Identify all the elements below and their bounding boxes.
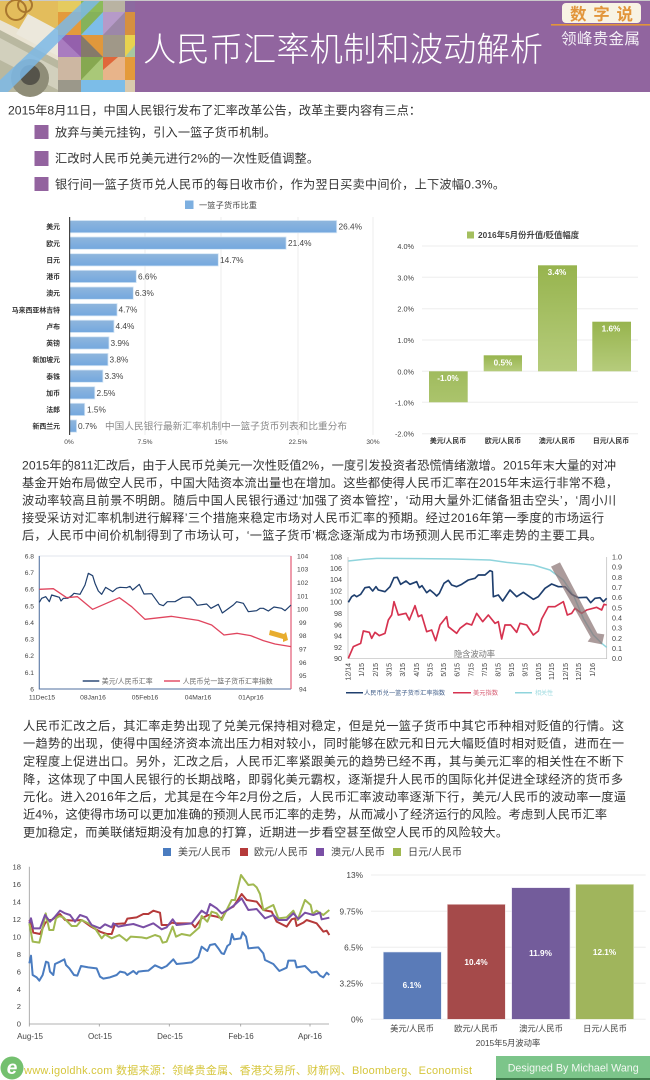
line chart: USD/CNY vs CNY basket index: 96 [299,660,307,667]
bar chart: currency basket weights: 14.7% [220,255,244,265]
line chart: basket index, dollar index, correlation: 5/15 [428,663,434,677]
line chart: USD/CNY vs CNY basket index: 6.3 [25,636,34,644]
line chart: USD/CNY vs CNY basket index: 102 [297,580,308,587]
series: USD/CNY [39,573,291,613]
bar chart: currency basket weights: 澳元 [46,289,60,298]
line chart: currency volatility: 18 [13,862,21,871]
bar chart: May 2016 appreciation: 日元/人民币 [593,436,629,445]
bullet list: 放弃与美元挂钩，引入一篮子货币机制。 [55,124,276,140]
bullet list [34,124,505,192]
icon: e logo: e [7,1058,18,1079]
paragraph: after the 811 reform: 2015年的811汇改后，由于人民币兑美元一次性贬值2%，一度引发投资者恐慌情绪激增。2015年末大量的对冲 [22,458,616,472]
line chart: basket index, dollar index, correlation: 0.5 [612,603,622,612]
line chart: basket index, dollar index, correlation: 1/16 [590,663,597,677]
bar chart: currency basket weights: 3.8% [110,354,129,364]
bar chart: May 2016 appreciation: 0.0% [397,367,415,376]
line chart: basket index, dollar index, correlation: 7/15 [468,663,476,677]
legend: volatility series: 美元/人民币 [178,846,231,858]
line chart: basket index, dollar index, correlation: 4/15 [414,663,421,677]
line chart: USD/CNY vs CNY basket index: 6.5 [25,603,34,610]
paragraph: after the 811 reform: 接受采访对汇率机制进行解释’三个措施来稳定市场对人民币汇率的预期。经过2016年第一季度的市场运行 [22,510,604,525]
bar chart: currency basket weights: 美元 [46,222,60,231]
paragraph: after the reform trend: 定程度上促进出口。另外，汇改之后，人民币汇率紧跟美元的趋势已经不再，其与美元汇率的相关性在不断下 [23,754,624,768]
paragraph: after the reform trend: 元化。进入2016年之后，尤其是在今年2月份之后，人民币汇率波动率逐渐下行，美元/人民币的波动率一度逼 [23,789,626,804]
line chart: USD/CNY vs CNY basket index: 6.2 [25,653,34,660]
bar chart: May 2016 appreciation: 2.0% [397,305,415,314]
line chart: basket index, dollar index, correlation: 10/15 [536,663,543,681]
bar chart: May 2015 volatility: 9.75% [339,906,364,916]
bar chart: May 2015 volatility: 3.25% [339,978,364,988]
bar chart: May 2015 volatility: 13% [346,870,364,880]
bar chart: May 2016 appreciation: 3.0% [397,273,415,282]
line chart: USD/CNY vs CNY basket index: 6 [30,686,34,693]
bar chart: currency basket weights: 日元 [46,256,60,264]
line chart: basket index, dollar index, correlation: 90 [334,654,342,663]
paragraph: after the 811 reform [22,458,618,542]
line chart: basket index, dollar index, correlation: 0.3 [612,624,622,633]
series: dollar index [348,602,607,658]
bar chart: currency basket weights: 1.5% [87,404,107,414]
legend: volatility series: 澳元/人民币 [331,846,385,858]
bar chart: currency basket weights: 7.5% [137,439,153,446]
arrow: orange trend arrow [269,630,288,642]
line chart: basket index, dollar index, correlation: 0.8 [612,573,622,582]
designer credit: Designed By Michael Wang [508,1062,639,1074]
icon: e logo [0,1056,24,1080]
line chart: USD/CNY vs CNY basket index: 08Jan16 [80,694,106,702]
line chart: currency volatility: Apr-16 [298,1032,323,1041]
bar chart: May 2016 appreciation: 1.6% [602,324,621,334]
line chart: USD/CNY vs CNY basket index: 94 [299,686,307,693]
line chart: USD/CNY vs CNY basket index: 6.8 [25,553,34,560]
line chart: USD/CNY vs CNY basket index: 104 [297,553,308,560]
line chart: basket index, dollar index, correlation: 12/15 [563,663,570,681]
line chart: USD/CNY vs CNY basket index: 103 [297,567,308,574]
line chart: basket index, dollar index, correlation: 94 [334,632,342,641]
line chart: basket index, dollar index, correlation: 9/15 [522,663,530,677]
paragraph: after the reform trend [23,718,626,840]
title: 人民币汇率机制和波动解析 [143,32,543,69]
series: basket index [348,571,607,603]
line chart: basket index, dollar index, correlation: 106 [330,564,342,573]
bar chart: May 2015 volatility: 6.1% [403,981,422,990]
line chart: USD/CNY vs CNY basket index: 101 [297,593,308,600]
bar chart: May 2015 volatility: 日元/人民币 [583,1024,627,1034]
line chart: basket index, dollar index, correlation: 96 [334,620,342,629]
line chart: basket index, dollar index, correlation: 3/15 [400,663,407,677]
line chart: basket index, dollar index, correlation: 104 [330,575,342,584]
bar chart: May 2016 appreciation: -1.0% [395,398,415,407]
bar chart: May 2015 volatility: 6.5% [344,942,364,952]
chart caption: 中国人民银行最新汇率机制中一篮子货币列表和比重分布 [105,420,347,432]
paragraph: after the 811 reform: 波动率较高且前景不明朗。随后中国人民银行通过‘加强了资本管控’，‘动用大量外汇储备狙击空头’，‘周小川 [22,492,616,508]
paragraph: after the reform trend: 近4%，这使得市场可以更加准确的预测人民币汇率的走势，从而减小了经济运行的风险。考虑到人民币汇率 [23,806,607,822]
bar chart: currency basket weights: 22.5% [289,439,307,446]
line chart: basket index, dollar index, correlation: 108 [330,552,342,562]
paragraph: after the reform trend: 降，这体现了中国人民银行的长期战略，即弱化美元霸权，逐渐提升人民币的国际化并促进全球经济的货币多 [23,772,623,786]
line chart: currency volatility: Dec-15 [157,1032,183,1041]
bar chart: May 2015 volatility: 12.1% [593,948,617,957]
bar chart: currency basket weights: 6.3% [135,288,155,298]
line chart: basket index, dollar index, correlation: 2/15 [373,663,380,677]
line chart: basket index, dollar index, correlation: 12/15 [576,663,583,681]
line chart: basket index, dollar index, correlation [330,552,622,697]
line chart: basket index, dollar index, correlation: 98 [334,609,342,618]
line chart: currency volatility: 2 [17,1002,21,1011]
bar chart: currency basket weights: 0% [64,439,74,446]
paragraph: after the 811 reform: 后，人民币中间价机制得到了市场认可，‘一篮子货币’概念逐渐成为市场预测人民币汇率走势的主要工具。 [22,528,602,542]
line chart: USD/CNY vs CNY basket index: 100 [297,607,308,614]
bar chart: currency basket weights: 马来西亚林吉特 [12,305,60,314]
bar chart: currency basket weights: 6.6% [138,272,158,282]
bar chart: currency basket weights: 3.9% [110,338,130,348]
intro text: 2015年8月11日，中国人民银行发布了汇率改革公告，改革主要内容有三点： [8,102,421,118]
bar chart: currency basket weights: 新加坡元 [32,355,60,364]
bar chart: currency basket weights: 0.7% [78,421,98,431]
line chart: USD/CNY vs CNY basket index: 01Apr16 [238,694,264,702]
series: USD/CNY volatility [29,932,329,981]
line chart: currency volatility: 16 [13,880,21,889]
bar chart: currency basket weights: 15% [214,439,228,446]
bar chart: May 2015 volatility: 澳元/人民币 [519,1024,563,1034]
badge: 数字说 [562,3,641,24]
legend: appreciation: 2016年5月份升值/贬值幅度 [478,230,580,240]
footer [0,1056,650,1080]
legend: volatility series: 欧元/人民币 [254,846,308,858]
bar chart: currency basket weights: 法郎 [46,405,60,414]
line chart: currency volatility: 12 [13,915,21,924]
bar chart: currency basket weights: 2.5% [96,388,116,398]
bar chart: May 2016 appreciation: 3.4% [548,268,567,277]
line chart: basket index, dollar index, correlation: 0.1 [612,644,622,653]
line chart: basket index, dollar index, correlation: 7/15 [482,663,489,677]
data sources: www.igoldhk.com 数据来源：领峰贵金属、香港交易所、财新网、Bloomberg、Economist [23,1063,472,1077]
bar chart: currency basket weights [12,200,380,446]
line chart: currency volatility: Aug-15 [17,1032,43,1041]
badge: 数字说: 数字说 [570,4,633,24]
line chart: basket index, dollar index, correlation: 0.7 [612,583,622,592]
bar chart: May 2016 appreciation [395,230,638,445]
line chart: USD/CNY vs CNY basket index: 6.4 [25,620,34,627]
line chart: basket index, dollar index, correlation: 9/15 [509,663,516,677]
line chart: basket index, dollar index, correlation: 0.0 [612,654,622,663]
series: EUR/CNY volatility [29,894,329,935]
line chart: USD/CNY vs CNY basket index: 97 [299,646,307,654]
line chart: USD/CNY vs CNY basket index: 6.1 [25,670,34,677]
bar chart: currency basket weights: 港币 [46,272,60,281]
designer credit [496,1056,650,1080]
bar chart: May 2015 volatility: 美元/人民币 [390,1024,434,1034]
line chart: USD/CNY vs CNY basket index: 05Feb16 [132,694,158,702]
line chart: currency volatility: 10 [13,932,21,941]
bar chart: May 2015 volatility: 11.9% [529,949,553,958]
paragraph: after the reform trend: 人民币汇改之后，其汇率走势出现了兑美元保持相对稳定，但是兑一篮子货币中其它币种相对贬值的行情。这 [23,718,624,733]
line chart: USD/CNY vs CNY basket index: 6.7 [25,570,34,577]
line chart: USD/CNY vs CNY basket index: 04Mar16 [185,694,211,702]
brand name: 领峰贵金属 [561,30,640,48]
line chart: basket index, dollar index, correlation: 0.9 [612,563,622,572]
line chart: basket index, dollar index, correlation: 100 [330,598,342,607]
line chart: currency volatility [13,862,329,1041]
series: JPY/CNY volatility [29,875,329,943]
bar chart: May 2016 appreciation: 0.5% [494,358,513,368]
line chart: USD/CNY vs CNY basket index: 99 [299,620,307,627]
line chart: basket index, dollar index, correlation: 1.0 [612,552,622,562]
line chart: basket index, dollar index, correlation: 11/15 [549,663,556,680]
bar chart: currency basket weights: 泰铢 [46,372,60,381]
bar chart: May 2015 volatility: 欧元/人民币 [454,1024,498,1034]
bar chart: May 2015 volatility: 0% [351,1014,364,1024]
bar chart: currency basket weights: 英镑 [46,338,60,348]
paragraph: after the 811 reform: 基金开始布局做空人民币，中国大陆资本流出量也在增加。这些都使得人民币汇率在2015年末运行非常不稳， [22,475,618,490]
legend: basket weights: 一篮子货币比重 [199,200,257,210]
legend: left line chart: 美元/人民币汇率 [102,676,153,686]
series: CNY basket index [39,589,291,647]
series: correlation [348,558,607,647]
line chart: USD/CNY vs CNY basket index: 98 [299,633,307,640]
bar chart: currency basket weights: 3.3% [104,371,124,381]
bar chart: May 2016 appreciation: -2.0% [395,430,415,439]
bar chart: currency basket weights: 4.4% [116,321,135,331]
line chart: currency volatility: 0 [17,1020,21,1029]
bar chart: May 2016 appreciation: 4.0% [397,242,415,251]
legend: right line chart [346,689,553,697]
line chart: USD/CNY vs CNY basket index [25,553,308,702]
bar chart: May 2016 appreciation: 1.0% [397,336,415,345]
line chart: basket index, dollar index, correlation: 5/15 [441,663,448,677]
bullet list: 汇改时人民币兑美元进行2%的一次性贬值调整。 [55,150,319,166]
bar chart: currency basket weights: 4.7% [118,304,138,314]
line chart: currency volatility: 6 [17,967,21,976]
line chart: basket index, dollar index, correlation: 92 [334,643,342,652]
bar chart: currency basket weights: 26.4% [338,222,363,232]
line chart: basket index, dollar index, correlation: 0.4 [612,613,622,622]
line chart: USD/CNY vs CNY basket index: 11Dec15 [29,694,55,702]
legend: volatility series [163,846,462,858]
line chart: currency volatility: Oct-15 [88,1032,113,1041]
bar chart: May 2016 appreciation: -1.0% [437,374,459,383]
legend: left line chart: 人民币兑一篮子货币汇率指数 [183,676,273,686]
header image: banknote collage [0,0,135,97]
paragraph: after the reform trend: 更加稳定，而美联储短期没有加息的打算，近期进一步看空甚至做空人民币的风险较大。 [23,824,508,840]
line chart: currency volatility: 4 [17,985,21,994]
legend: left line chart [83,676,273,686]
chart note: implied volatility: 隐含波动率 [454,649,495,659]
line chart: currency volatility: 14 [13,897,21,906]
line chart: USD/CNY vs CNY basket index: 6.6 [25,587,34,594]
header banner [0,0,650,97]
bar chart: May 2016 appreciation: 欧元/人民币 [485,436,521,445]
legend: right line chart: 美元指数 [473,689,499,697]
legend: right line chart: 相关性 [535,689,553,697]
bullet list: 银行间一篮子货币兑人民币的每日收市价，作为翌日买卖中间价，上下波幅0.3%。 [55,176,505,192]
line chart: basket index, dollar index, correlation: 0.2 [612,634,622,643]
bar chart: currency basket weights: 新西兰元 [32,422,60,431]
line chart: basket index, dollar index, correlation: 1/15 [359,663,366,677]
line chart: basket index, dollar index, correlation: 6/15 [454,663,462,677]
paragraph: after the reform trend: 一趋势的出现，使得中国经济资本流出压力相对较小，同时能够在欧元和日元大幅贬值时相对贬值，进而在一 [23,736,624,750]
line chart: USD/CNY vs CNY basket index: 95 [299,673,307,680]
line chart: basket index, dollar index, correlation: 3/15 [386,663,394,677]
line chart: basket index, dollar index, correlation: 102 [330,586,342,595]
bar chart: May 2015 volatility: 10.4% [464,958,488,967]
bar chart: May 2015 volatility [339,870,646,1048]
legend: volatility series: 日元/人民币 [408,846,462,858]
line chart: currency volatility: Feb-16 [228,1032,254,1041]
bar chart: May 2016 appreciation: 美元/人民币 [430,436,466,445]
line chart: basket index, dollar index, correlation: 12/14 [346,663,352,681]
line chart: basket index, dollar index, correlation: 8/15 [496,663,502,677]
bar chart: currency basket weights: 21.4% [288,238,312,248]
bar chart: currency basket weights: 30% [366,439,380,446]
series: AUD/CNY volatility [29,898,329,929]
legend: right line chart: 人民币兑一篮子货币汇率指数 [364,689,446,697]
chart title: May 2015 volatility: 2015年5月波动率 [476,1038,540,1048]
bar chart: May 2016 appreciation: 澳元/人民币 [539,436,575,445]
line chart: basket index, dollar index, correlation: 0.6 [612,593,622,602]
arrow: downward correlation trend [551,562,604,644]
bar chart: currency basket weights: 卢布 [46,322,60,331]
bar chart: currency basket weights: 加币 [46,388,60,398]
bar chart: currency basket weights: 欧元 [46,239,60,248]
line chart: currency volatility: 8 [17,950,21,959]
